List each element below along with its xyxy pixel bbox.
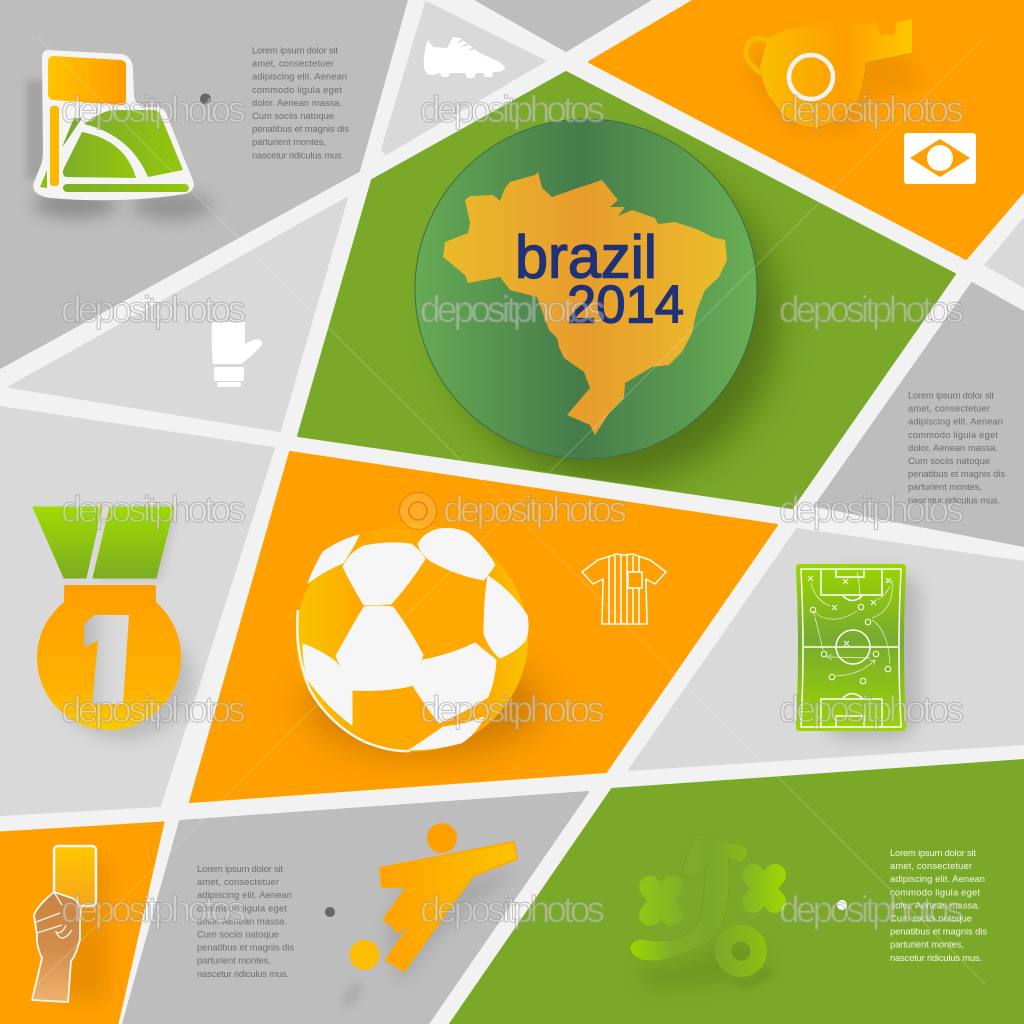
text block: right lorem: penatibus et magnis dis: [908, 468, 1005, 479]
watermark: depositphotos: [61, 889, 246, 930]
text block: tactics lorem: [890, 847, 987, 963]
text block: bottom lorem: Lorem ipsum dolor sit: [197, 863, 283, 874]
watermark: depositphotos: [420, 889, 605, 930]
text block: bottom lorem: amet, consectetuer: [197, 876, 279, 887]
watermark: depositphotos: [61, 689, 246, 730]
globe badge: [415, 119, 778, 484]
text block: bottom lorem: adipiscing elit. Aenean: [197, 889, 292, 900]
panel: top grey sliver: [476, 0, 650, 51]
text block: top-left lorem: parturient montes,: [252, 136, 326, 147]
watermark: depositphotos: [779, 89, 964, 130]
text block: right lorem: Lorem ipsum dolor sit: [908, 390, 994, 400]
icon: corner flag sticker: [26, 50, 212, 220]
icon: referee shirt: [582, 554, 666, 624]
watermark: depositphotos: [61, 89, 246, 130]
text block: right lorem: parturient montes,: [908, 481, 982, 492]
text block: top-left lorem: Lorem ipsum dolor sit: [252, 44, 338, 56]
icon: whistle: [745, 19, 925, 135]
text block: tactics lorem: dolor. Aenean massa.: [890, 899, 980, 910]
text block: right lorem: nascetur ridiculus mus.: [908, 494, 1000, 505]
icon: football player: [338, 823, 520, 1011]
panel: card orange: [0, 822, 164, 1024]
panel: small right grey: [984, 217, 1024, 288]
text block: bottom lorem: commodo ligula eget: [197, 902, 287, 913]
text block: top-left lorem: penatibus et magnis dis: [252, 123, 349, 134]
text block: right lorem: amet, consectetuer: [908, 403, 990, 414]
text block: bottom lorem: parturient montes,: [197, 955, 271, 966]
heading: brazil 2014: 2014: [567, 276, 684, 334]
watermark: depositphotos: [420, 689, 605, 730]
text block: right lorem: dolor. Aenean massa.: [908, 442, 998, 453]
panel: player grey: [123, 792, 588, 1024]
heading: brazil 2014: brazil: [515, 224, 657, 290]
text block: top-left lorem: dolor. Aenean massa.: [252, 97, 342, 108]
watermark: depositphotos: [420, 89, 605, 130]
panel: pitch: [629, 529, 1024, 770]
icon: football boot: [424, 37, 505, 78]
text block: bottom lorem: nascetur ridiculus mus.: [197, 968, 289, 979]
watermark: depositphotos: [779, 289, 964, 330]
icon: yellow card in hand: [32, 846, 108, 1002]
watermark: depositphotos: [779, 889, 964, 930]
panel: ball orange: [190, 452, 777, 802]
text block: tactics lorem: commodo ligula eget: [890, 886, 980, 897]
marker dot: tactics: [837, 900, 847, 910]
text block: top-left lorem: commodo ligula eget: [252, 84, 342, 95]
watermark: depositphotos: [779, 689, 964, 730]
watermark: depositphotos: [61, 489, 246, 530]
text block: bottom lorem: dolor. Aenean massa.: [197, 915, 287, 926]
text block: top-left lorem: nascetur ridiculus mus.: [252, 149, 344, 160]
icon: football: [296, 524, 543, 755]
watermark: depositphotos: [61, 289, 246, 330]
text block: right lorem: [908, 390, 1005, 505]
panel: top-left grey: [0, 0, 407, 368]
text block: right lorem: Cum sociis natoque: [908, 455, 990, 466]
icon: gold medal: [33, 507, 193, 740]
icon: brazil flag: [904, 133, 976, 184]
text block: tactics lorem: Cum sociis natoque: [890, 912, 972, 924]
marker dot: bottom: [325, 907, 335, 917]
text block: right lorem: commodo ligula eget: [908, 429, 998, 440]
panel: medal: [0, 407, 274, 815]
text block: tactics lorem: adipiscing elit. Aenean: [890, 873, 985, 884]
text block: right lorem: adipiscing elit. Aenean: [908, 416, 1003, 427]
panel: centre green: [298, 72, 955, 508]
text block: bottom lorem: penatibus et magnis dis: [197, 942, 294, 953]
text block: top-left lorem: adipiscing elit. Aenean: [252, 71, 347, 82]
marker dot: top-left: [200, 94, 211, 104]
text block: tactics lorem: parturient montes,: [890, 939, 964, 950]
watermark: depositphotos: [420, 289, 605, 330]
text block: tactics lorem: amet, consectetuer: [890, 860, 972, 871]
text block: top-left lorem: [252, 44, 349, 160]
text block: top-left lorem: Cum sociis natoque: [252, 110, 334, 121]
panel: shoe: [382, 2, 545, 154]
icon: tactics arrow, crosses and circle: [630, 834, 775, 990]
panel: glove: [9, 198, 347, 431]
heading: brazil 2014: [515, 224, 684, 334]
watermark: depositphotos: [779, 489, 964, 530]
panel: tactics green: [450, 760, 1024, 1024]
text block: bottom lorem: [197, 863, 294, 979]
panel: right grey text: [815, 283, 1024, 546]
panel: whistle orange: [589, 0, 1024, 259]
text block: bottom lorem: Cum sociis natoque: [197, 928, 279, 940]
watermark: depositphotos: [443, 489, 627, 530]
text block: top-left lorem: amet, consectetuer: [252, 58, 334, 69]
icon: tactics pitch: [796, 564, 920, 740]
text block: tactics lorem: penatibus et magnis dis: [890, 926, 987, 937]
map of brazil: [443, 172, 727, 435]
icon: goalkeeper glove: [212, 322, 262, 387]
text block: tactics lorem: Lorem ipsum dolor sit: [890, 847, 976, 858]
text block: tactics lorem: nascetur ridiculus mus.: [890, 952, 982, 963]
